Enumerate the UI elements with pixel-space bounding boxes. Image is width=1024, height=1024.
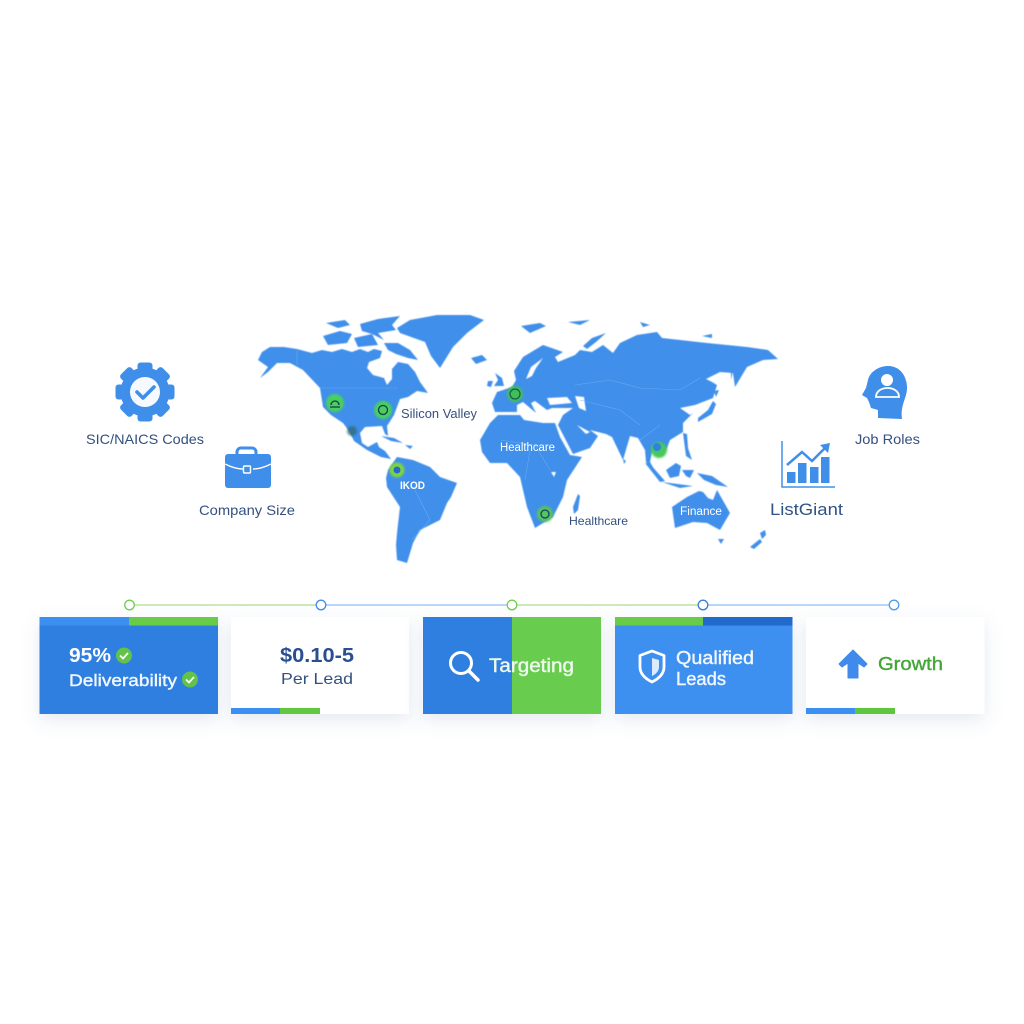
inland seas (526, 358, 590, 477)
icon: magnifier (450, 652, 478, 680)
marker: Colombia (390, 462, 404, 478)
Arctic islands (323, 316, 418, 360)
label: Qualified Leads (676, 648, 754, 689)
Europe and Asia (492, 332, 778, 476)
North America (258, 347, 428, 459)
marker: Mexico (347, 426, 357, 436)
Black Sea (547, 397, 572, 405)
Lake Victoria (551, 472, 556, 477)
icon: gear with check (116, 362, 174, 422)
New Guinea (697, 473, 728, 487)
card: qualified leads (615, 617, 792, 714)
label: Per Lead: Per Lead (281, 671, 353, 688)
Greenland (397, 315, 484, 368)
label: Qualified Leads: Qualified (676, 648, 754, 668)
card: targeting (423, 617, 601, 714)
Japan (698, 390, 719, 422)
Sakhalin (731, 366, 734, 380)
card: growth (806, 617, 984, 714)
icon: growth chart (782, 441, 835, 487)
marker: South Africa (537, 506, 553, 522)
Borneo (666, 463, 681, 478)
label: Qualified Leads: Leads (676, 669, 726, 689)
label: Silicon Valley: Silicon Valley (401, 407, 478, 421)
label: Healthcare on Africa: Healthcare (500, 442, 555, 454)
icon: head with person (862, 366, 907, 419)
Caspian Sea (575, 396, 586, 411)
Philippines (683, 433, 692, 460)
Sri Lanka (623, 459, 626, 464)
map labels (400, 407, 722, 528)
world map (258, 315, 778, 563)
Tasmania (718, 539, 724, 544)
label: Finance: Finance (680, 506, 722, 518)
timeline (125, 600, 899, 610)
label: Deliverability: Deliverability (69, 671, 178, 690)
label: Growth: Growth (878, 654, 943, 674)
icon: up arrow (839, 650, 867, 678)
Java (662, 482, 693, 488)
Novaya Zemlya (583, 333, 606, 349)
Sumatra (645, 463, 665, 482)
map markers (326, 386, 667, 522)
label: Targeting: Targeting (489, 656, 574, 677)
stat: price: $0.10-5 (280, 645, 354, 667)
New Zealand (750, 530, 766, 549)
icon: briefcase (225, 448, 271, 488)
Svalbard and northern islands (521, 320, 712, 338)
label: South America: IKOD (400, 480, 425, 492)
Baltic Sea (526, 358, 543, 379)
United Kingdom and Ireland (487, 373, 504, 387)
stat: 95%: 95% (69, 645, 111, 667)
Cuba and Caribbean (381, 436, 413, 449)
label: Healthcare near Africa: Healthcare (569, 514, 628, 528)
feature: Company Size (199, 448, 295, 518)
Australia (672, 490, 730, 530)
marker: eastern US (374, 401, 392, 419)
feature: Job Roles (855, 366, 920, 447)
label: Job Roles (855, 431, 920, 447)
icon: shield (640, 651, 664, 682)
feature: ListGiant (770, 441, 843, 519)
Madagascar (573, 494, 580, 514)
icon: check badge (116, 648, 132, 664)
Africa (480, 415, 582, 528)
landmasses (258, 315, 778, 563)
icon: check badge (182, 672, 198, 688)
label: Company Size (199, 502, 295, 518)
feature: SIC/NAICS Codes (86, 362, 204, 447)
card: price per lead (231, 617, 409, 714)
marker: western US (326, 394, 344, 412)
Sulawesi (682, 470, 694, 478)
country borders (297, 350, 700, 540)
label: SIC/NAICS Codes (86, 431, 204, 447)
Iceland (471, 355, 487, 364)
label: ListGiant (770, 500, 843, 519)
card: deliverability (40, 617, 218, 714)
South America (386, 457, 457, 563)
Persian Gulf (577, 425, 590, 434)
marker: South-East Asia (651, 442, 667, 458)
marker: Europe (507, 386, 523, 402)
